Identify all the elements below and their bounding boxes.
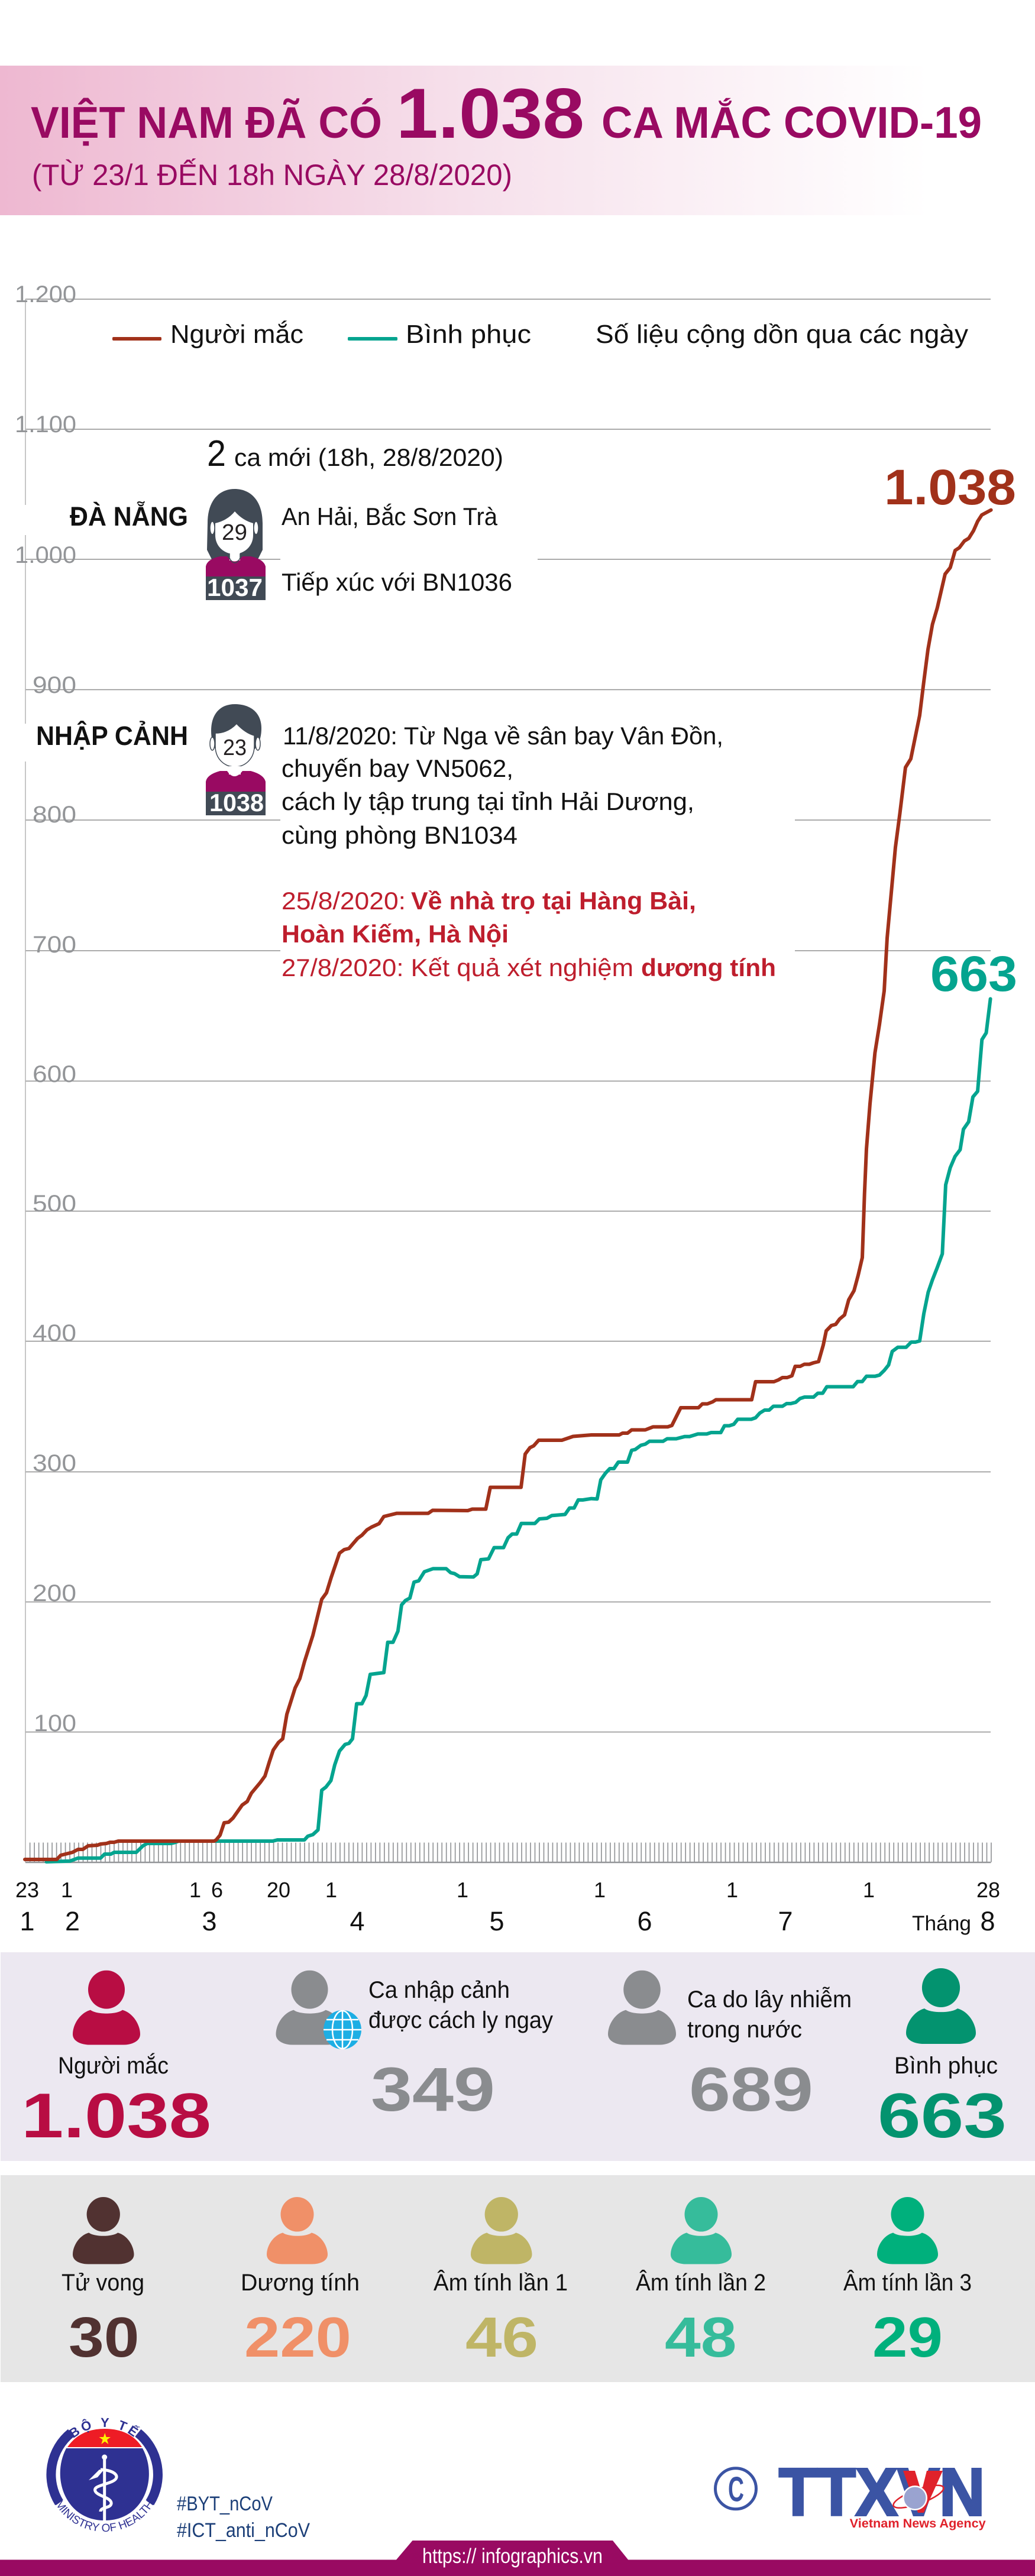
x axis day labels: 1 [325, 1878, 337, 1902]
stat: negative twice: 48 [665, 2306, 737, 2369]
logo: Ministry of Health [46, 2418, 163, 2532]
stat: imported cases: Ca nhập cảnh [368, 1977, 510, 2003]
patient 1038 travel history: cách ly tập trung tại tỉnh Hải Dương, [282, 788, 694, 815]
new cases heading [207, 433, 503, 474]
y axis labels: 500 [33, 1191, 76, 1217]
footer bar with url [0, 2541, 1035, 2576]
x axis month labels: 5 [489, 1906, 504, 1936]
callout: new cases [36, 433, 776, 981]
hashtags: #ICT_anti_nCoV [177, 2519, 310, 2542]
logo: Ministry of Health: BỘ Y TẾ [69, 2418, 140, 2438]
stat: domestic cases: trong nước [687, 2017, 802, 2043]
patient 1037 details: Tiếp xúc với BN1036 [282, 568, 512, 596]
value label: 663: 663 [930, 946, 1017, 1002]
legend: Bình phục [406, 320, 531, 349]
patient 1038 red notes [282, 887, 776, 981]
vertical axis [25, 299, 26, 1862]
stat: infected: 1.038 [21, 2080, 211, 2151]
stat: domestic cases [608, 1971, 852, 2124]
patient 1038 red notes: Hoàn Kiếm, Hà Nội [282, 920, 509, 948]
patient 1038 travel history: 11/8/2020: Từ Nga về sân bay Vân Đồn, [283, 722, 723, 750]
x axis month labels [20, 1906, 995, 1936]
title: 1.038 [396, 74, 584, 153]
x axis day labels: 1 [594, 1878, 606, 1902]
stat: positive [241, 2197, 360, 2369]
line chart [15, 281, 1017, 1936]
icon: patient 1038 [206, 704, 266, 816]
stat: imported cases [276, 1971, 553, 2124]
stat: recovered: 663 [878, 2080, 1007, 2151]
value label: 1.038: 1.038 [884, 459, 1016, 515]
stat: deaths [62, 2197, 144, 2369]
logo: Ministry of Health: MINISTRY OF HEALTH [56, 2501, 153, 2532]
stat: recovered: Bình phục [894, 2053, 998, 2079]
y axis labels: 1.000 [15, 542, 76, 568]
stat: deaths: Tử vong [62, 2270, 144, 2296]
stat: negative twice: Âm tính lần 2 [636, 2269, 766, 2296]
x axis month labels: 3 [202, 1906, 217, 1936]
hashtags: #BYT_nCoV [177, 2493, 273, 2515]
subtitle: (TỪ 23/1 ĐẾN 18h NGÀY 28/8/2020) [32, 158, 512, 192]
icon: globe [324, 2010, 361, 2049]
panel: main totals [1, 1952, 1035, 2161]
icon: patient 1038: 23 [223, 735, 247, 760]
y axis labels: 900 [33, 672, 76, 698]
day ticks on x axis [25, 1852, 992, 1862]
x axis month labels: 6 [637, 1906, 652, 1936]
y axis labels: 400 [33, 1320, 76, 1346]
title: CA MẮC COVID-19 [601, 98, 982, 147]
stat: negative three times: 29 [872, 2306, 943, 2369]
chart grid lines [25, 299, 991, 1732]
logo: copyright symbol [716, 2468, 756, 2509]
icon: patient 1037 [206, 489, 266, 601]
location: entry: NHẬP CẢNH [36, 721, 188, 751]
patient 1037 details [282, 503, 512, 596]
y axis labels: 800 [33, 802, 76, 828]
stat: deaths: 30 [69, 2306, 140, 2369]
x axis day labels: 1 [61, 1878, 73, 1902]
footer bar with url: https:// infographics.vn [422, 2545, 603, 2568]
line: infected [25, 510, 991, 1859]
stat: recovered [878, 1968, 1007, 2151]
stat: domestic cases: 689 [689, 2055, 813, 2124]
stat: imported cases: được cách ly ngay [368, 2007, 553, 2033]
panel: patient status [1, 2175, 1035, 2382]
logo: TTXVN: TTXVN [779, 2455, 985, 2529]
x axis month labels: 4 [350, 1906, 365, 1936]
stat: infected [21, 1971, 211, 2151]
stat: negative three times [843, 2197, 972, 2369]
legend [112, 320, 968, 349]
patient 1038 red notes: dương tính [641, 954, 776, 981]
legend: Số liệu cộng dồn qua các ngày [596, 320, 968, 349]
stat: negative once [434, 2197, 568, 2369]
stat: positive: 220 [244, 2306, 351, 2369]
stat: imported cases: 349 [371, 2055, 495, 2124]
x axis day labels: 6 [211, 1878, 223, 1902]
new cases heading: ca mới (18h, 28/8/2020) [234, 443, 503, 471]
y axis labels: 300 [33, 1450, 76, 1476]
x axis day labels: 1 [863, 1878, 875, 1902]
new cases heading: 2 [207, 433, 226, 474]
x axis day labels: 20 [267, 1878, 290, 1902]
y axis labels: 100 [34, 1710, 76, 1736]
y axis labels: 600 [33, 1061, 76, 1087]
x axis day labels: 1 [189, 1878, 201, 1902]
y axis labels: 1.200 [15, 281, 76, 307]
stat: infected: Người mắc [58, 2052, 169, 2079]
title: VIỆT NAM ĐÃ CÓ [31, 98, 382, 147]
header banner [0, 66, 982, 215]
logo: copyright symbol: C [728, 2470, 744, 2509]
x axis month labels: Tháng [912, 1912, 971, 1935]
x axis day labels: 1 [726, 1878, 738, 1902]
stat: domestic cases: Ca do lây nhiễm [687, 1986, 852, 2013]
x axis day labels: 23 [15, 1878, 39, 1902]
legend: Người mắc [170, 320, 303, 349]
patient 1038 red notes: Về nhà trọ tại Hàng Bài, [411, 887, 696, 915]
x axis day labels: 1 [457, 1878, 468, 1902]
patient 1038 travel history: chuyến bay VN5062, [282, 754, 513, 782]
patient 1038 travel history: cùng phòng BN1034 [282, 821, 518, 849]
logo: TTXVN: Vietnam News Agency [850, 2517, 986, 2530]
line: recovered [46, 999, 991, 1862]
icon: patient 1038: 1038 [209, 789, 264, 816]
x axis month labels: 2 [65, 1906, 80, 1936]
hashtags [177, 2493, 310, 2542]
x axis day labels: 28 [976, 1878, 1000, 1902]
stat: negative three times: Âm tính lần 3 [843, 2269, 972, 2296]
icon: patient 1037: 29 [222, 520, 247, 545]
stat: positive: Dương tính [241, 2270, 360, 2296]
x axis month labels: 1 [20, 1906, 35, 1936]
patient 1037 details: An Hải, Bắc Sơn Trà [282, 503, 498, 530]
y axis labels: 200 [33, 1580, 76, 1606]
patient 1038 red notes: 27/8/2020: Kết quả xét nghiệm [282, 954, 633, 981]
y axis labels: 1.100 [15, 411, 76, 438]
stat: negative once: Âm tính lần 1 [434, 2269, 568, 2296]
title [31, 74, 982, 153]
stat: negative once: 46 [465, 2306, 538, 2369]
x axis month labels: 8 [980, 1906, 995, 1936]
y axis labels [15, 281, 76, 1736]
y axis labels: 700 [33, 932, 76, 958]
patient 1038 red notes: 25/8/2020: [282, 887, 406, 915]
location: Da Nang: ĐÀ NẴNG [70, 501, 188, 532]
x axis month labels: 7 [778, 1906, 793, 1936]
icon: patient 1037: 1037 [207, 573, 263, 601]
stat: negative twice [636, 2197, 766, 2369]
patient 1038 travel history [282, 722, 723, 849]
x axis day labels [15, 1878, 1000, 1902]
